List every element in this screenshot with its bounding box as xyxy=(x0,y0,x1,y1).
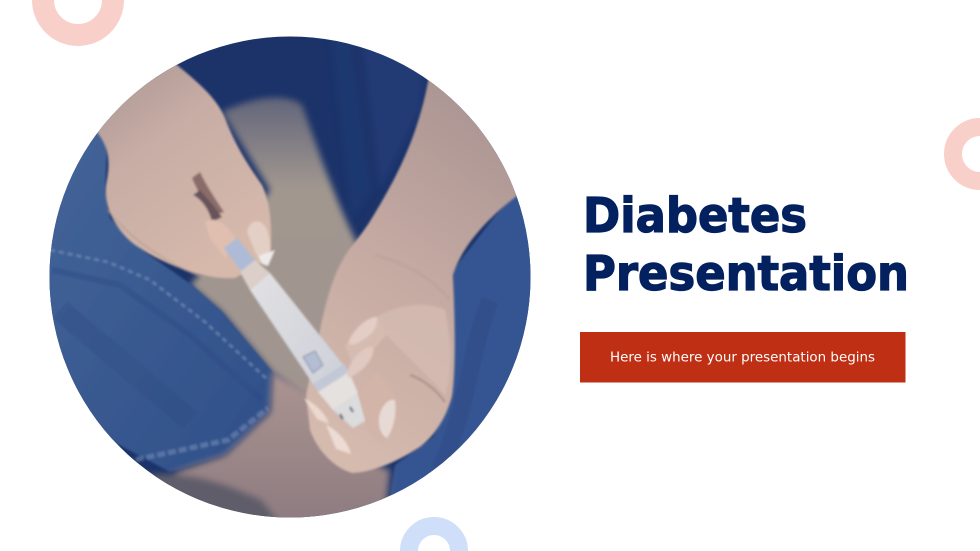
right arm and hand xyxy=(305,80,517,474)
title: Diabetes xyxy=(583,188,807,244)
decorative ring: bottom xyxy=(409,526,459,551)
nails and front fingers xyxy=(247,221,397,454)
decorative ring: top left xyxy=(43,0,113,35)
photo: hands using a lancet pen over jeans, in a circle with blue tint xyxy=(40,30,540,530)
lancet pen xyxy=(224,238,367,428)
fluffy beige background xyxy=(190,98,358,400)
dark jeans at top xyxy=(328,40,427,178)
subtitle banner xyxy=(580,332,906,382)
title: Presentation xyxy=(583,246,909,302)
decorative ring: right xyxy=(953,127,980,181)
left denim leg xyxy=(40,130,272,472)
right denim leg xyxy=(390,192,530,496)
bare lower leg xyxy=(140,372,390,530)
subtitle banner: Here is where your presentation begins xyxy=(610,350,875,366)
title xyxy=(583,188,909,302)
left hand xyxy=(90,55,271,278)
